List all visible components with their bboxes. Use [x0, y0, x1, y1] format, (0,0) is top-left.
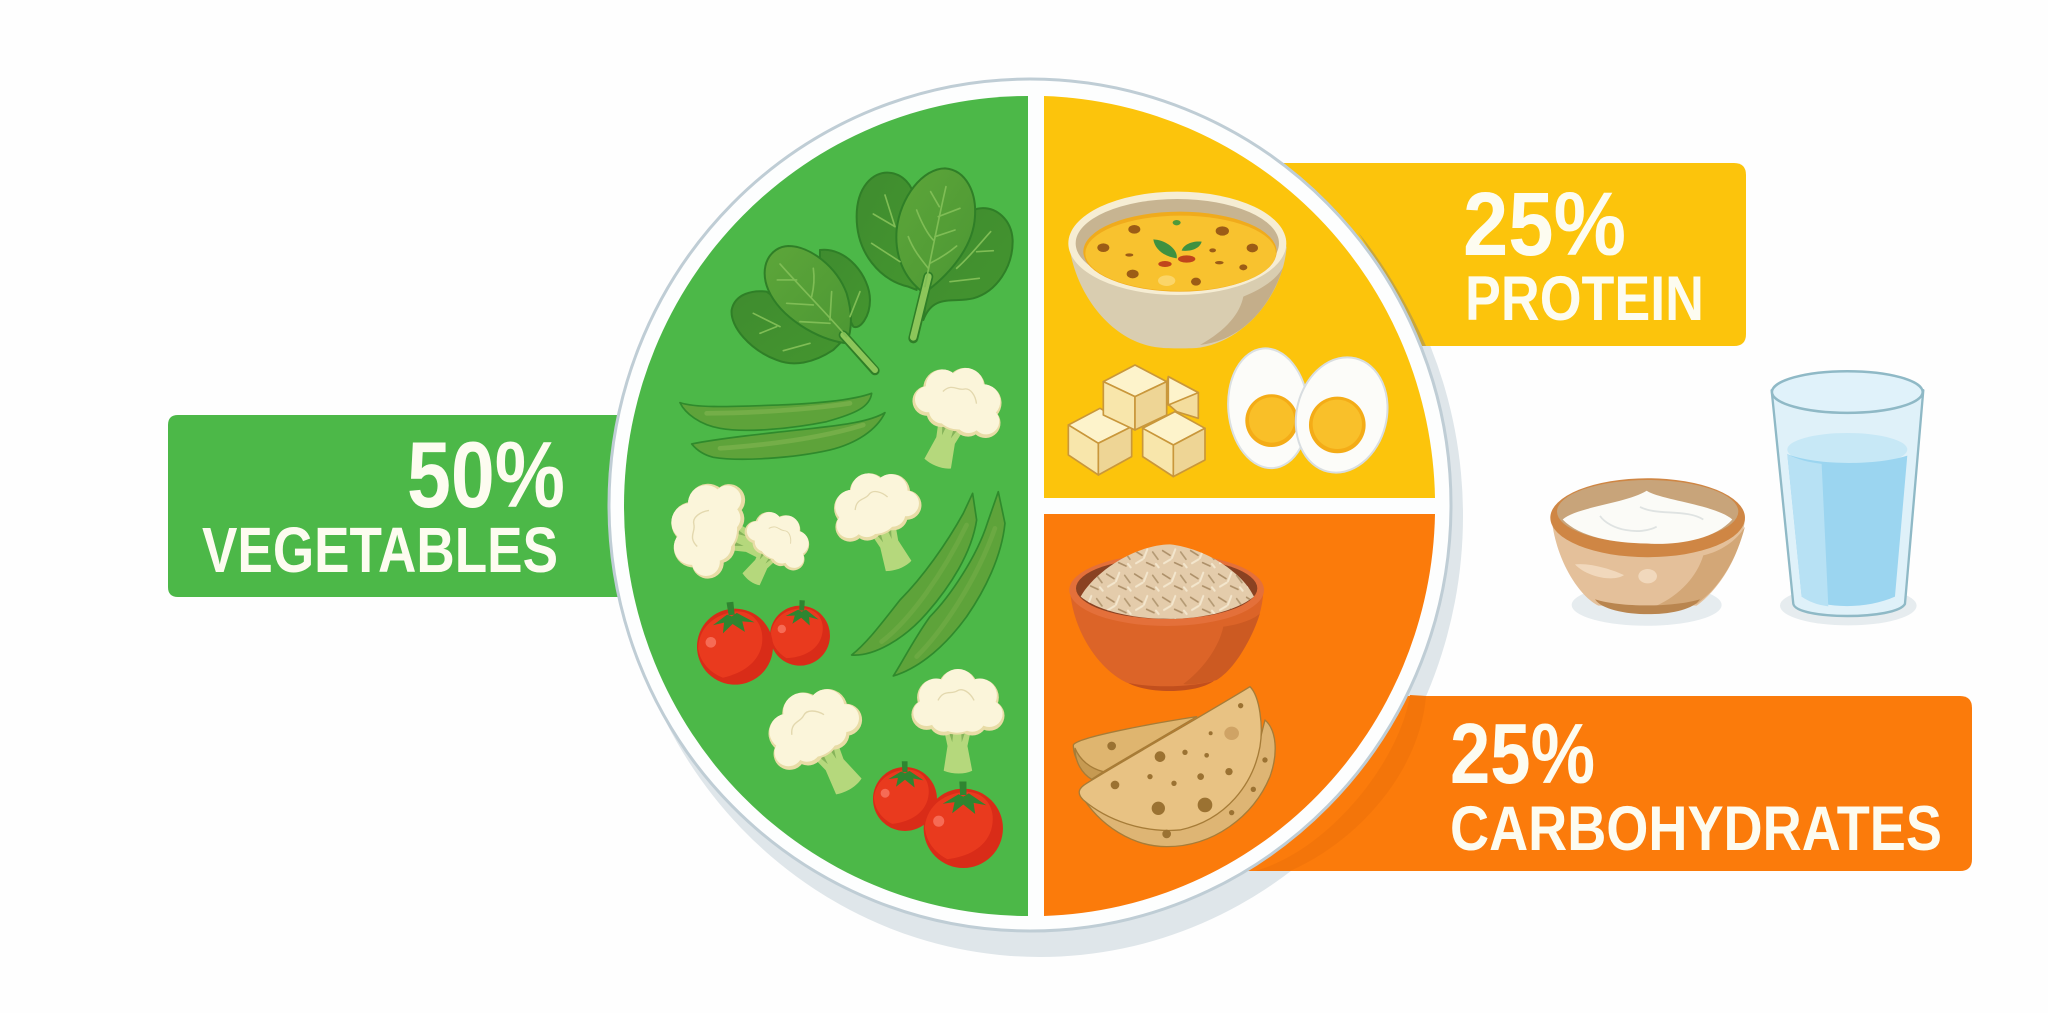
panel: carbohydrates section — [1044, 514, 1435, 916]
icon: tomatoes pair lower — [873, 761, 1003, 868]
icon: folded roti — [1073, 687, 1275, 847]
label value: 50%: 50% — [407, 422, 565, 527]
panel: protein section — [1044, 96, 1435, 498]
icon: spinach bunch left — [732, 246, 875, 371]
icon: spinach bunch right — [857, 168, 1013, 338]
icon: bowl of yogurt — [1550, 478, 1745, 626]
label name: carbohydrates: CARBOHYDRATES — [1450, 794, 1942, 864]
icon: cauliflower lower center — [751, 670, 892, 815]
panel: vegetables section — [624, 96, 1028, 916]
label: 25% carbohydrates — [1240, 695, 1972, 871]
icon: tomatoes pair upper — [693, 598, 832, 688]
plate rim — [609, 79, 1451, 931]
label value: 25% protein: 25% — [1463, 175, 1626, 275]
icon: bowl of dal — [1068, 192, 1287, 348]
icon: cauliflower left — [657, 470, 792, 597]
icon: cauliflower upper right — [893, 353, 1015, 482]
icon: paneer cubes — [1068, 365, 1205, 477]
icon: glass of water — [1772, 371, 1923, 625]
plate drop shadow — [667, 346, 1463, 957]
label name: protein: PROTEIN — [1465, 264, 1704, 334]
label: 25% protein — [1260, 163, 1746, 346]
label name: vegetables: VEGETABLES — [202, 514, 558, 586]
label value: 25% carbohydrates: 25% — [1450, 707, 1595, 802]
icon: green beans horizontal — [680, 393, 885, 459]
icon: cauliflower small — [722, 498, 822, 601]
icon: boiled egg halves — [1223, 345, 1399, 482]
label: 50% vegetables — [168, 415, 660, 597]
icon: cauliflower center — [820, 458, 941, 585]
icon: green beans diagonal — [852, 492, 1005, 676]
icon: cauliflower lower right — [911, 669, 1004, 774]
icon: bowl of brown rice — [1069, 544, 1264, 691]
